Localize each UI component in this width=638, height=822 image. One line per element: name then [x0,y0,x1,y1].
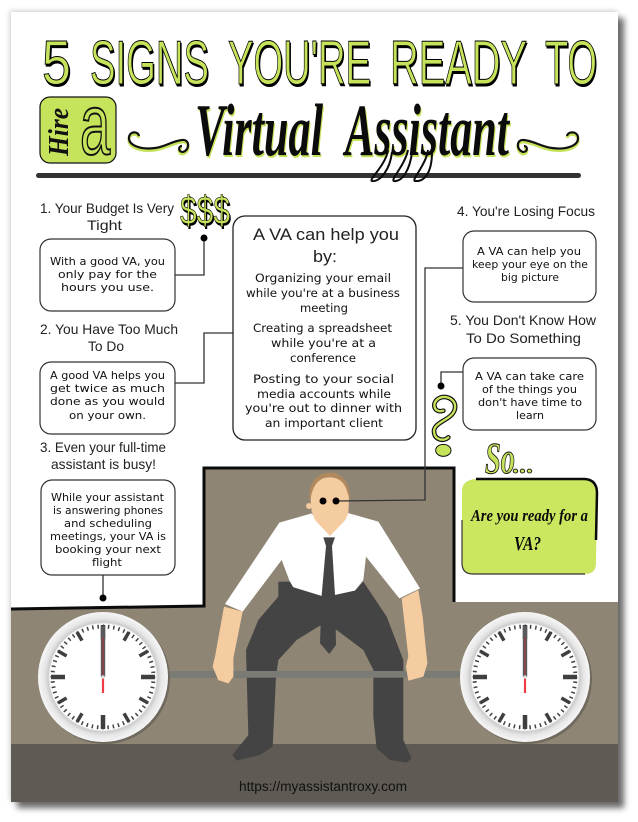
center panel: a VA can help you by: while you're at a [271,336,376,350]
sign 1 heading [40,200,174,233]
left arm [213,607,243,683]
so... heading: So [485,434,515,483]
script heading: Virtual Assistant [129,90,578,181]
hire a badge: a [80,77,111,173]
center panel: a VA can help you by: conference [290,351,356,365]
sign 2 box: get twice as much [50,383,165,395]
necktie [320,537,336,654]
title: READY [390,29,527,98]
sign 3 box: While your assistant [51,492,164,504]
callout: are you ready: VA? [514,533,541,555]
website url: https://myassistantroxy.com [239,779,407,794]
center panel: a VA can help you by: an important client [265,416,384,430]
callout: are you ready: Are you ready for a [470,506,588,525]
hire a badge: Hire [44,108,75,157]
sign 1 heading: Tight [87,217,122,233]
center panel: a VA can help you by: Organizing your email [255,271,391,285]
sign 5 heading: To Do Something [466,330,581,346]
title: 5 [42,29,71,98]
header rule [36,173,581,178]
sign 5 box: learn [516,410,544,422]
title: TO [546,31,598,100]
sign 3 box: booking your next [55,544,161,556]
barbell bar [165,671,465,678]
scene background [11,468,618,802]
shirt [225,513,420,612]
sign 5 box [463,358,596,430]
trousers and shoes [232,582,412,763]
sign 3 heading: assistant is busy! [51,456,156,472]
sign 3 box [41,480,175,575]
sign 2 heading: 2. You Have Too Much [40,321,178,337]
sign 2 heading: To Do [88,338,124,354]
title: TO [545,29,597,98]
center panel: a VA can help you by: media accounts while [257,387,391,401]
sign 4 box: A VA can help you [477,246,581,258]
bar in front of legs [233,671,407,678]
title [42,29,598,100]
ear [306,503,312,509]
title: SIGNS [90,29,209,98]
sign 2 box [40,362,175,434]
sign 5 box: don't have time to [478,397,582,409]
center panel: a VA can help you by: A VA can help you [253,225,399,244]
right arm [402,590,427,681]
sign 3 heading [40,439,166,472]
title: 5 [43,31,72,100]
question mark icon [434,397,455,456]
sign 5 heading: 5. You Don't Know How [450,312,597,328]
title: READY [391,31,528,100]
center panel: a VA can help you by [233,216,416,440]
sign 3 box: meetings, your VA is [50,531,166,543]
sign 2 box: on your own. [69,410,146,422]
sign 4 box [463,231,596,302]
sign 2 box: done as you would [50,396,165,408]
center panel: a VA can help you by: you're out to dinner with [245,401,402,415]
sign 1 box [40,239,175,311]
sign 3 box: flight [92,557,122,569]
hair [309,473,350,500]
face [311,476,349,536]
hands [213,657,427,683]
person lifting clocks [213,473,427,763]
center panel: a VA can help you by: by: [313,247,337,266]
sign 4 heading: 4. You're Losing Focus [457,203,595,219]
sign 4 box: keep your eye on the [472,259,588,271]
sign 3 box: is answering phones [53,505,163,517]
connectors [103,238,463,598]
center panel: a VA can help you by: while you're at a business [246,286,400,300]
callout: are you ready [462,479,597,574]
sign 4 box: big picture [501,272,559,284]
center panel: a VA can help you by: meeting [300,301,348,315]
sign 2 box: A good VA helps you [50,370,165,382]
script heading: Virtual Assistant: Assistant [344,92,511,174]
sign 5 box: of the things you [482,384,577,396]
sign 1 box: only pay for the [58,269,157,281]
sign 3 box: and scheduling [64,518,152,530]
sign 1 heading: 1. Your Budget Is Very [40,200,174,216]
sign 2 heading [40,321,178,354]
sign 1 box: hours you use. [61,282,154,294]
title: YOU'RE [229,31,372,100]
center panel: a VA can help you by: Creating a spreadsheet [253,321,393,335]
so... heading: ... [513,453,534,479]
hire a badge [40,77,116,173]
sign 5 box: A VA can take care [475,371,584,383]
right clock [460,612,592,744]
left clock [38,612,170,744]
script heading: Virtual Assistant: Assistant [343,90,510,172]
sign 1 box: With a good VA, you [50,256,165,268]
sign 5 heading [450,312,597,346]
script heading: Virtual Assistant: Virtual [195,90,323,172]
dollar signs icon: $$$ [181,191,231,235]
script heading: Virtual Assistant: Virtual [196,92,324,174]
title: YOU'RE [228,29,371,98]
connector dots [100,234,444,602]
dollar signs icon: $$$ [180,189,230,233]
sign 3 heading: 3. Even your full-time [40,439,166,455]
title: SIGNS [91,31,210,100]
center panel: a VA can help you by: Posting to your social [253,372,394,386]
